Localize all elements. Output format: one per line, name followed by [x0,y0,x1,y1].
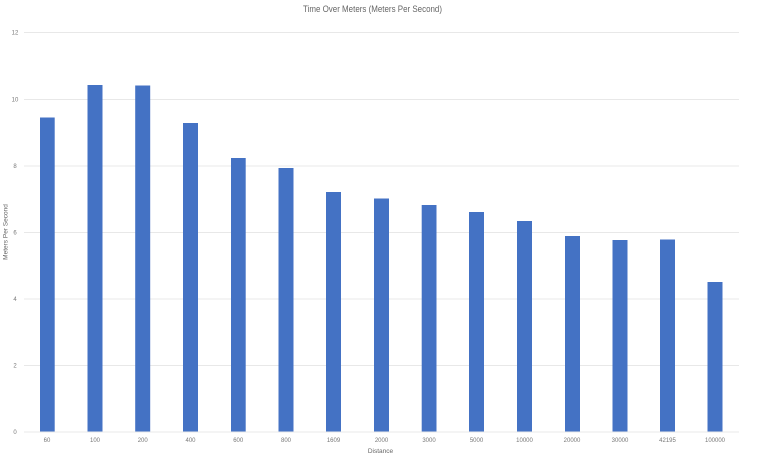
x axis category labels: 800 [281,438,292,444]
y axis tick labels: 8 [13,164,17,170]
y axis tick labels: 4 [13,297,17,303]
x axis category labels: 5000 [470,438,484,444]
y axis title: Meters Per Second [2,204,10,260]
x axis category labels: 10000 [516,438,534,444]
y axis tick labels: 12 [12,30,19,36]
x axis category labels: 42195 [659,438,677,444]
x axis category labels: 30000 [612,438,629,444]
x axis category labels: 1609 [327,438,341,444]
bars [40,85,722,432]
y axis tick labels: 6 [13,230,17,236]
x axis category labels: 600 [233,438,244,444]
x axis category labels: 100 [90,438,101,444]
x axis category labels: 3000 [422,438,436,444]
x axis category labels: 20000 [564,438,581,444]
y axis tick labels: 0 [13,430,17,436]
x axis category labels: 60 [44,438,51,444]
x axis category labels: 400 [185,438,196,444]
x axis title: Distance [368,448,394,455]
y axis tick labels: 2 [13,364,17,370]
title: Time Over Meters (Meters Per Second) [303,4,442,14]
y axis tick labels: 10 [12,98,19,104]
x axis category labels: 100000 [705,438,726,444]
y axis tick labels [12,30,19,436]
x axis category labels: 200 [138,438,148,444]
x axis category labels: 2000 [375,438,389,444]
x axis category labels [44,438,726,444]
